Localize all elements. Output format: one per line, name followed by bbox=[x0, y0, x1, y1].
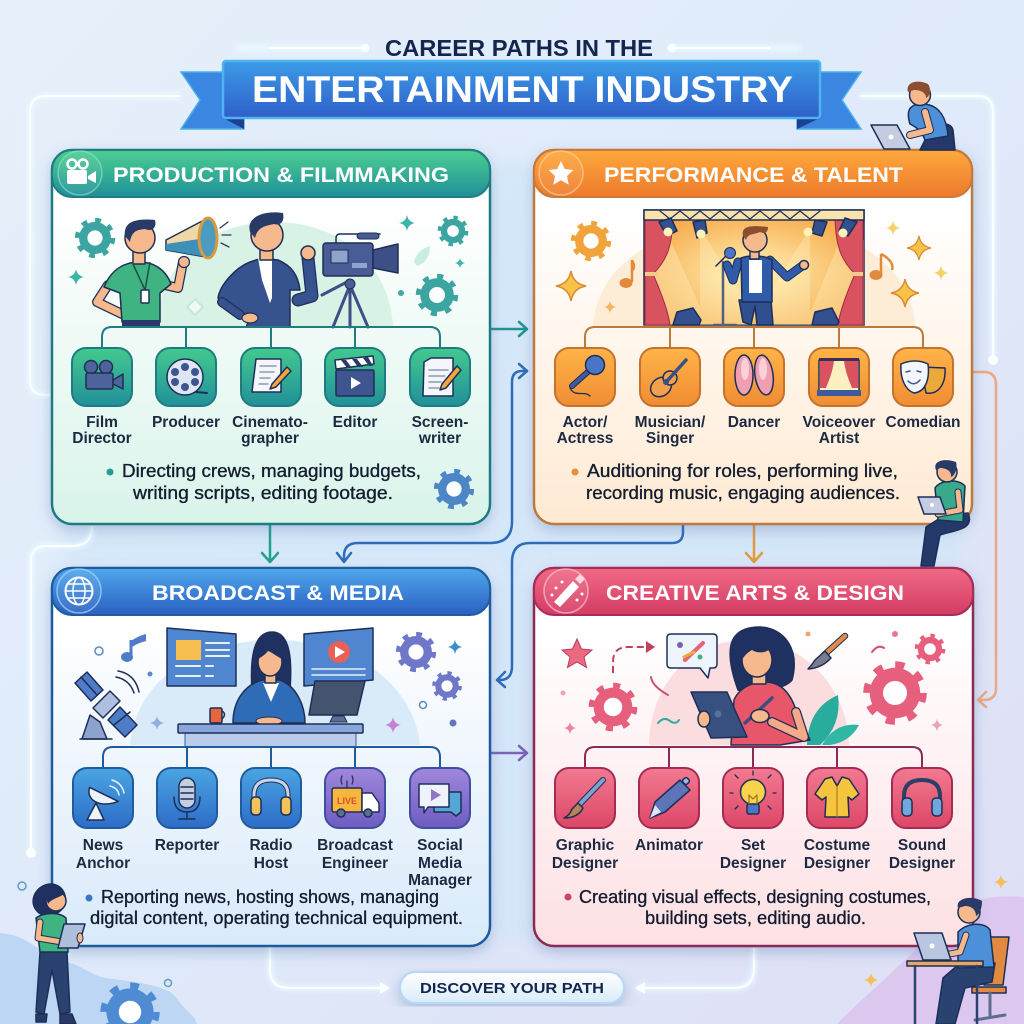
role: Social Media Manager bbox=[408, 768, 472, 889]
description text: building sets, editing audio. bbox=[645, 908, 866, 928]
panel: Performance & Talent bbox=[534, 150, 972, 524]
role: Broadcast Engineer: LIVE bbox=[337, 796, 357, 806]
paint brush bbox=[824, 636, 845, 655]
role: Cinematographer bbox=[232, 348, 308, 447]
role: Voiceover Artist: Voiceover bbox=[803, 414, 875, 431]
panel header bar bbox=[52, 568, 490, 615]
role: Producer bbox=[152, 348, 220, 431]
role: Graphic Designer: Graphic bbox=[556, 837, 615, 854]
role: Screenwriter bbox=[410, 348, 470, 447]
role: Animator bbox=[635, 768, 703, 854]
role: Costume Designer bbox=[804, 768, 871, 872]
description text bbox=[564, 887, 931, 928]
panel body bbox=[534, 150, 972, 524]
description text: digital content, operating technical equipment. bbox=[90, 908, 463, 928]
role: Set Designer bbox=[720, 768, 786, 872]
role: Radio Host bbox=[241, 768, 301, 872]
org connector lines bbox=[585, 747, 922, 768]
description text bbox=[106, 461, 421, 503]
role: Musician/Singer bbox=[635, 348, 706, 447]
header icon: star bbox=[539, 151, 583, 195]
panel body bbox=[52, 150, 490, 524]
panel header bar bbox=[534, 150, 972, 197]
role: Costume Designer: Designer bbox=[804, 855, 870, 872]
role: Comedian bbox=[886, 348, 960, 431]
person: right seated with laptop bbox=[918, 460, 969, 566]
header title: CREATIVE ARTS & DESIGN bbox=[606, 582, 904, 605]
illustration: designer with tablet bbox=[560, 627, 943, 745]
role: Cinematographer: grapher bbox=[241, 430, 299, 447]
org connector lines bbox=[102, 327, 440, 348]
role: Film Director: Director bbox=[72, 430, 132, 447]
man with megaphone bbox=[97, 285, 122, 314]
role: News Anchor: News bbox=[83, 837, 123, 854]
role: Producer: Producer bbox=[152, 414, 220, 431]
role: Cinematographer: Cinemato- bbox=[232, 414, 308, 431]
leaves bbox=[807, 695, 839, 745]
icon: blue gear bbox=[437, 472, 471, 506]
role: Broadcast Engineer bbox=[317, 768, 393, 872]
panel header bar bbox=[52, 150, 490, 197]
role: Set Designer: Set bbox=[741, 837, 765, 854]
person: top right with laptop bbox=[871, 82, 955, 150]
illustration: director and cameraman bbox=[68, 212, 466, 327]
role: News Anchor bbox=[73, 768, 133, 872]
megaphone bbox=[166, 219, 206, 257]
panel header bar bbox=[534, 568, 973, 615]
role: Broadcast Engineer: Broadcast bbox=[317, 837, 393, 854]
org connector lines bbox=[585, 327, 923, 348]
role: Set Designer: Designer bbox=[720, 855, 786, 872]
satellite bbox=[75, 672, 137, 739]
role: Radio Host: Host bbox=[254, 855, 288, 872]
panel: Broadcast & Media bbox=[52, 568, 490, 946]
person: bottom left with tablet bbox=[33, 884, 85, 1024]
title main: ENTERTAINMENT INDUSTRY bbox=[252, 69, 793, 110]
description text bbox=[572, 461, 900, 503]
header title: BROADCAST & MEDIA bbox=[152, 582, 404, 605]
description text: Auditioning for roles, performing live, bbox=[587, 461, 898, 481]
role: Graphic Designer: Designer bbox=[552, 855, 618, 872]
role: Actor/Actress: Actress bbox=[557, 430, 613, 447]
role: Broadcast Engineer: Engineer bbox=[322, 855, 388, 872]
role: Dancer bbox=[724, 348, 784, 431]
person: bottom right at desk bbox=[907, 898, 1009, 1024]
designer bbox=[730, 627, 794, 692]
role: Actor/Actress: Actor/ bbox=[563, 414, 608, 431]
man in blazer bbox=[298, 258, 312, 300]
panel body bbox=[52, 568, 490, 946]
role: Reporter: Reporter bbox=[155, 837, 219, 854]
title kicker: CAREER PATHS IN THE bbox=[385, 35, 653, 61]
description text: Creating visual effects, designing costumes, bbox=[579, 887, 931, 907]
role: Costume Designer: Costume bbox=[804, 837, 871, 854]
role: Editor: Editor bbox=[333, 414, 377, 431]
singer bbox=[739, 300, 773, 325]
illustration: stage with singer bbox=[556, 210, 948, 327]
background blob: bottom right bbox=[837, 896, 1024, 1024]
video camera on tripod bbox=[322, 283, 368, 327]
description text: Reporting news, hosting shows, managing bbox=[101, 887, 439, 907]
role: Social Media Manager: Manager bbox=[408, 872, 472, 889]
role: Reporter bbox=[155, 768, 219, 854]
role: Social Media Manager: Social bbox=[417, 837, 463, 854]
background blob: bottom left bbox=[0, 933, 197, 1024]
panel body bbox=[534, 568, 973, 946]
role: Sound Designer bbox=[889, 768, 955, 872]
role: Voiceover Artist: Artist bbox=[819, 430, 859, 447]
role: Screenwriter: Screen- bbox=[412, 414, 468, 431]
header icon: camera bbox=[58, 151, 102, 195]
role: Voiceover Artist bbox=[803, 348, 875, 447]
header icon: magic pen bbox=[544, 569, 588, 613]
header title: PERFORMANCE & TALENT bbox=[604, 164, 903, 187]
illustration: news desk and satellite bbox=[75, 628, 462, 747]
role: Screenwriter: writer bbox=[418, 430, 461, 447]
role: News Anchor: Anchor bbox=[76, 855, 130, 872]
description text: Directing crews, managing budgets, bbox=[122, 461, 421, 481]
role: Dancer: Dancer bbox=[728, 414, 780, 431]
header icon: globe bbox=[57, 569, 101, 613]
role: Graphic Designer bbox=[552, 768, 618, 872]
description text: writing scripts, editing footage. bbox=[132, 483, 393, 503]
decorative gear and rings bottom bbox=[18, 875, 1008, 1024]
role: Radio Host: Radio bbox=[249, 837, 293, 854]
description text: recording music, engaging audiences. bbox=[586, 483, 900, 503]
role: Animator: Animator bbox=[635, 837, 703, 854]
role: Musician/Singer: Singer bbox=[646, 430, 694, 447]
call to action pill bbox=[400, 972, 624, 1003]
header title: PRODUCTION & FILMMAKING bbox=[113, 164, 449, 187]
role: Editor bbox=[325, 348, 385, 431]
title ribbon bbox=[181, 61, 861, 129]
role: Film Director bbox=[72, 348, 132, 447]
role: Sound Designer: Designer bbox=[889, 855, 955, 872]
anchor woman bbox=[251, 632, 291, 690]
role: Actor/Actress bbox=[555, 348, 615, 447]
call to action pill: DISCOVER YOUR PATH bbox=[420, 980, 604, 997]
background glow between panels bbox=[60, 160, 960, 940]
role: Musician/Singer: Musician/ bbox=[635, 414, 706, 431]
panel: Creative Arts & Design bbox=[534, 568, 973, 946]
role: Sound Designer: Sound bbox=[898, 837, 946, 854]
role: Social Media Manager: Media bbox=[418, 855, 462, 872]
role: Comedian: Comedian bbox=[886, 414, 960, 431]
panel: Production & Filmmaking bbox=[52, 150, 490, 524]
colored connector arrows between panels bbox=[262, 322, 996, 760]
org connector lines bbox=[103, 747, 440, 768]
role: Film Director: Film bbox=[86, 414, 118, 431]
description text bbox=[86, 887, 463, 928]
